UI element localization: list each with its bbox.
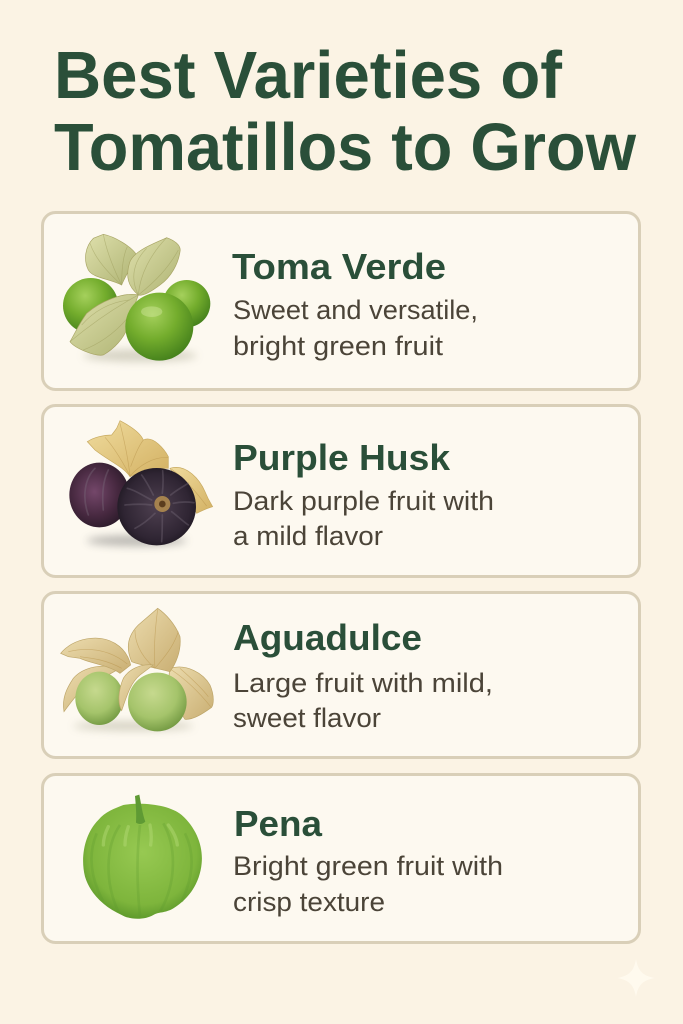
icon: Aguadulce tomatillos <box>61 608 213 731</box>
icon: sparkle <box>617 959 655 997</box>
description: Toma Verde: bright green fruit <box>233 331 444 361</box>
description: Pena: crisp texture <box>233 887 385 917</box>
panel: Pena <box>42 774 640 942</box>
heading: Pena: Pena <box>234 803 323 844</box>
panel: Purple Husk <box>42 406 640 576</box>
panel: Toma Verde <box>42 212 640 390</box>
description: Aguadulce: Large fruit with mild, <box>233 668 493 698</box>
heading: Aguadulce: Aguadulce <box>233 617 422 658</box>
icon: Toma Verde tomatillos <box>63 234 210 362</box>
description: Purple Husk: Dark purple fruit with <box>233 486 494 516</box>
icon: Pena tomatillo <box>83 795 202 919</box>
heading: Purple Husk: Purple Husk <box>233 437 451 478</box>
title: Best Varieties of <box>54 38 563 113</box>
description: Aguadulce: sweet flavor <box>233 703 381 733</box>
title <box>54 38 637 185</box>
title: Tomatillos to Grow <box>54 110 637 185</box>
panel: Aguadulce <box>42 592 640 758</box>
icon: Purple Husk tomatillos <box>69 421 213 546</box>
description: Purple Husk: a mild flavor <box>233 521 383 551</box>
description: Pena: Bright green fruit with <box>233 851 503 881</box>
description: Purple Husk <box>233 486 494 551</box>
description: Pena <box>233 851 503 917</box>
description: Aguadulce <box>233 668 493 733</box>
description: Toma Verde <box>233 295 478 361</box>
heading: Toma Verde: Toma Verde <box>232 246 446 287</box>
description: Toma Verde: Sweet and versatile, <box>233 295 478 325</box>
